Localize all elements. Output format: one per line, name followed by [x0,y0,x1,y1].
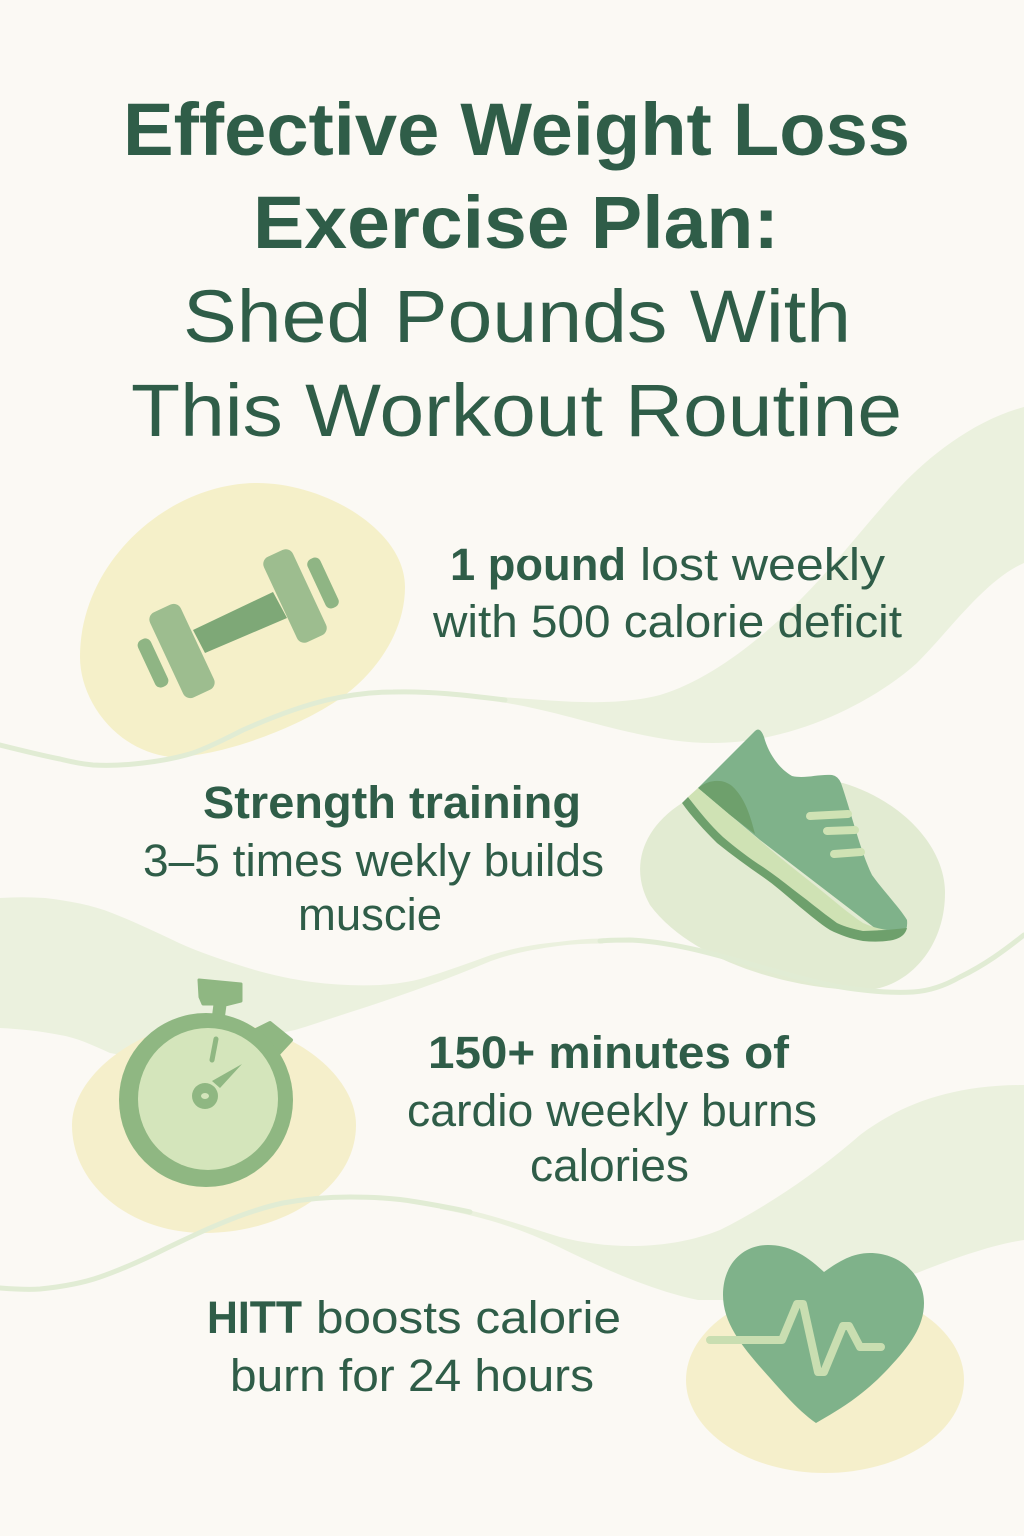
blob: heart background [686,1287,964,1473]
icon: stopwatch [119,980,293,1187]
icon: running shoe [682,729,907,942]
text: strength training: muscie [298,889,442,940]
text: 150+ minutes of cardio: calories [530,1140,689,1191]
title: This Workout Routine [131,369,902,452]
text: HIIT boosts calorie [207,1292,621,1401]
text: 1 pound lost weekly: with 500 calorie deficit [432,596,903,647]
blob: shoe background [640,775,945,990]
title: Shed Pounds With [183,275,851,358]
text: HIIT boosts calorie: boosts calorie [316,1292,621,1343]
title: Exercise Plan: [253,181,779,264]
title: Effective Weight Loss [123,88,910,171]
background wave bands [0,407,1024,1300]
icon: heart with pulse [710,1245,924,1423]
text: strength training [143,777,604,940]
text: strength training: Strength training [203,777,581,828]
text: strength training: 3–5 times wekly builds [143,835,604,886]
title [123,88,910,452]
text: 150+ minutes of cardio [407,1027,817,1191]
text: 1 pound lost weekly: 1 pound [450,539,626,590]
blob: stopwatch background [72,1022,356,1233]
text: 1 pound lost weekly [432,539,903,647]
icon: dumbbell [136,547,341,701]
blob: dumbbell background [80,483,405,757]
text: HIIT boosts calorie: burn for 24 hours [230,1350,594,1401]
text: 150+ minutes of cardio: 150+ minutes of [428,1027,790,1078]
background thin wave lines [0,692,1024,1289]
text: HIIT boosts calorie: HITT [207,1292,302,1343]
text: 150+ minutes of cardio: cardio weekly burns [407,1085,817,1136]
text: 1 pound lost weekly: lost weekly [640,539,886,590]
